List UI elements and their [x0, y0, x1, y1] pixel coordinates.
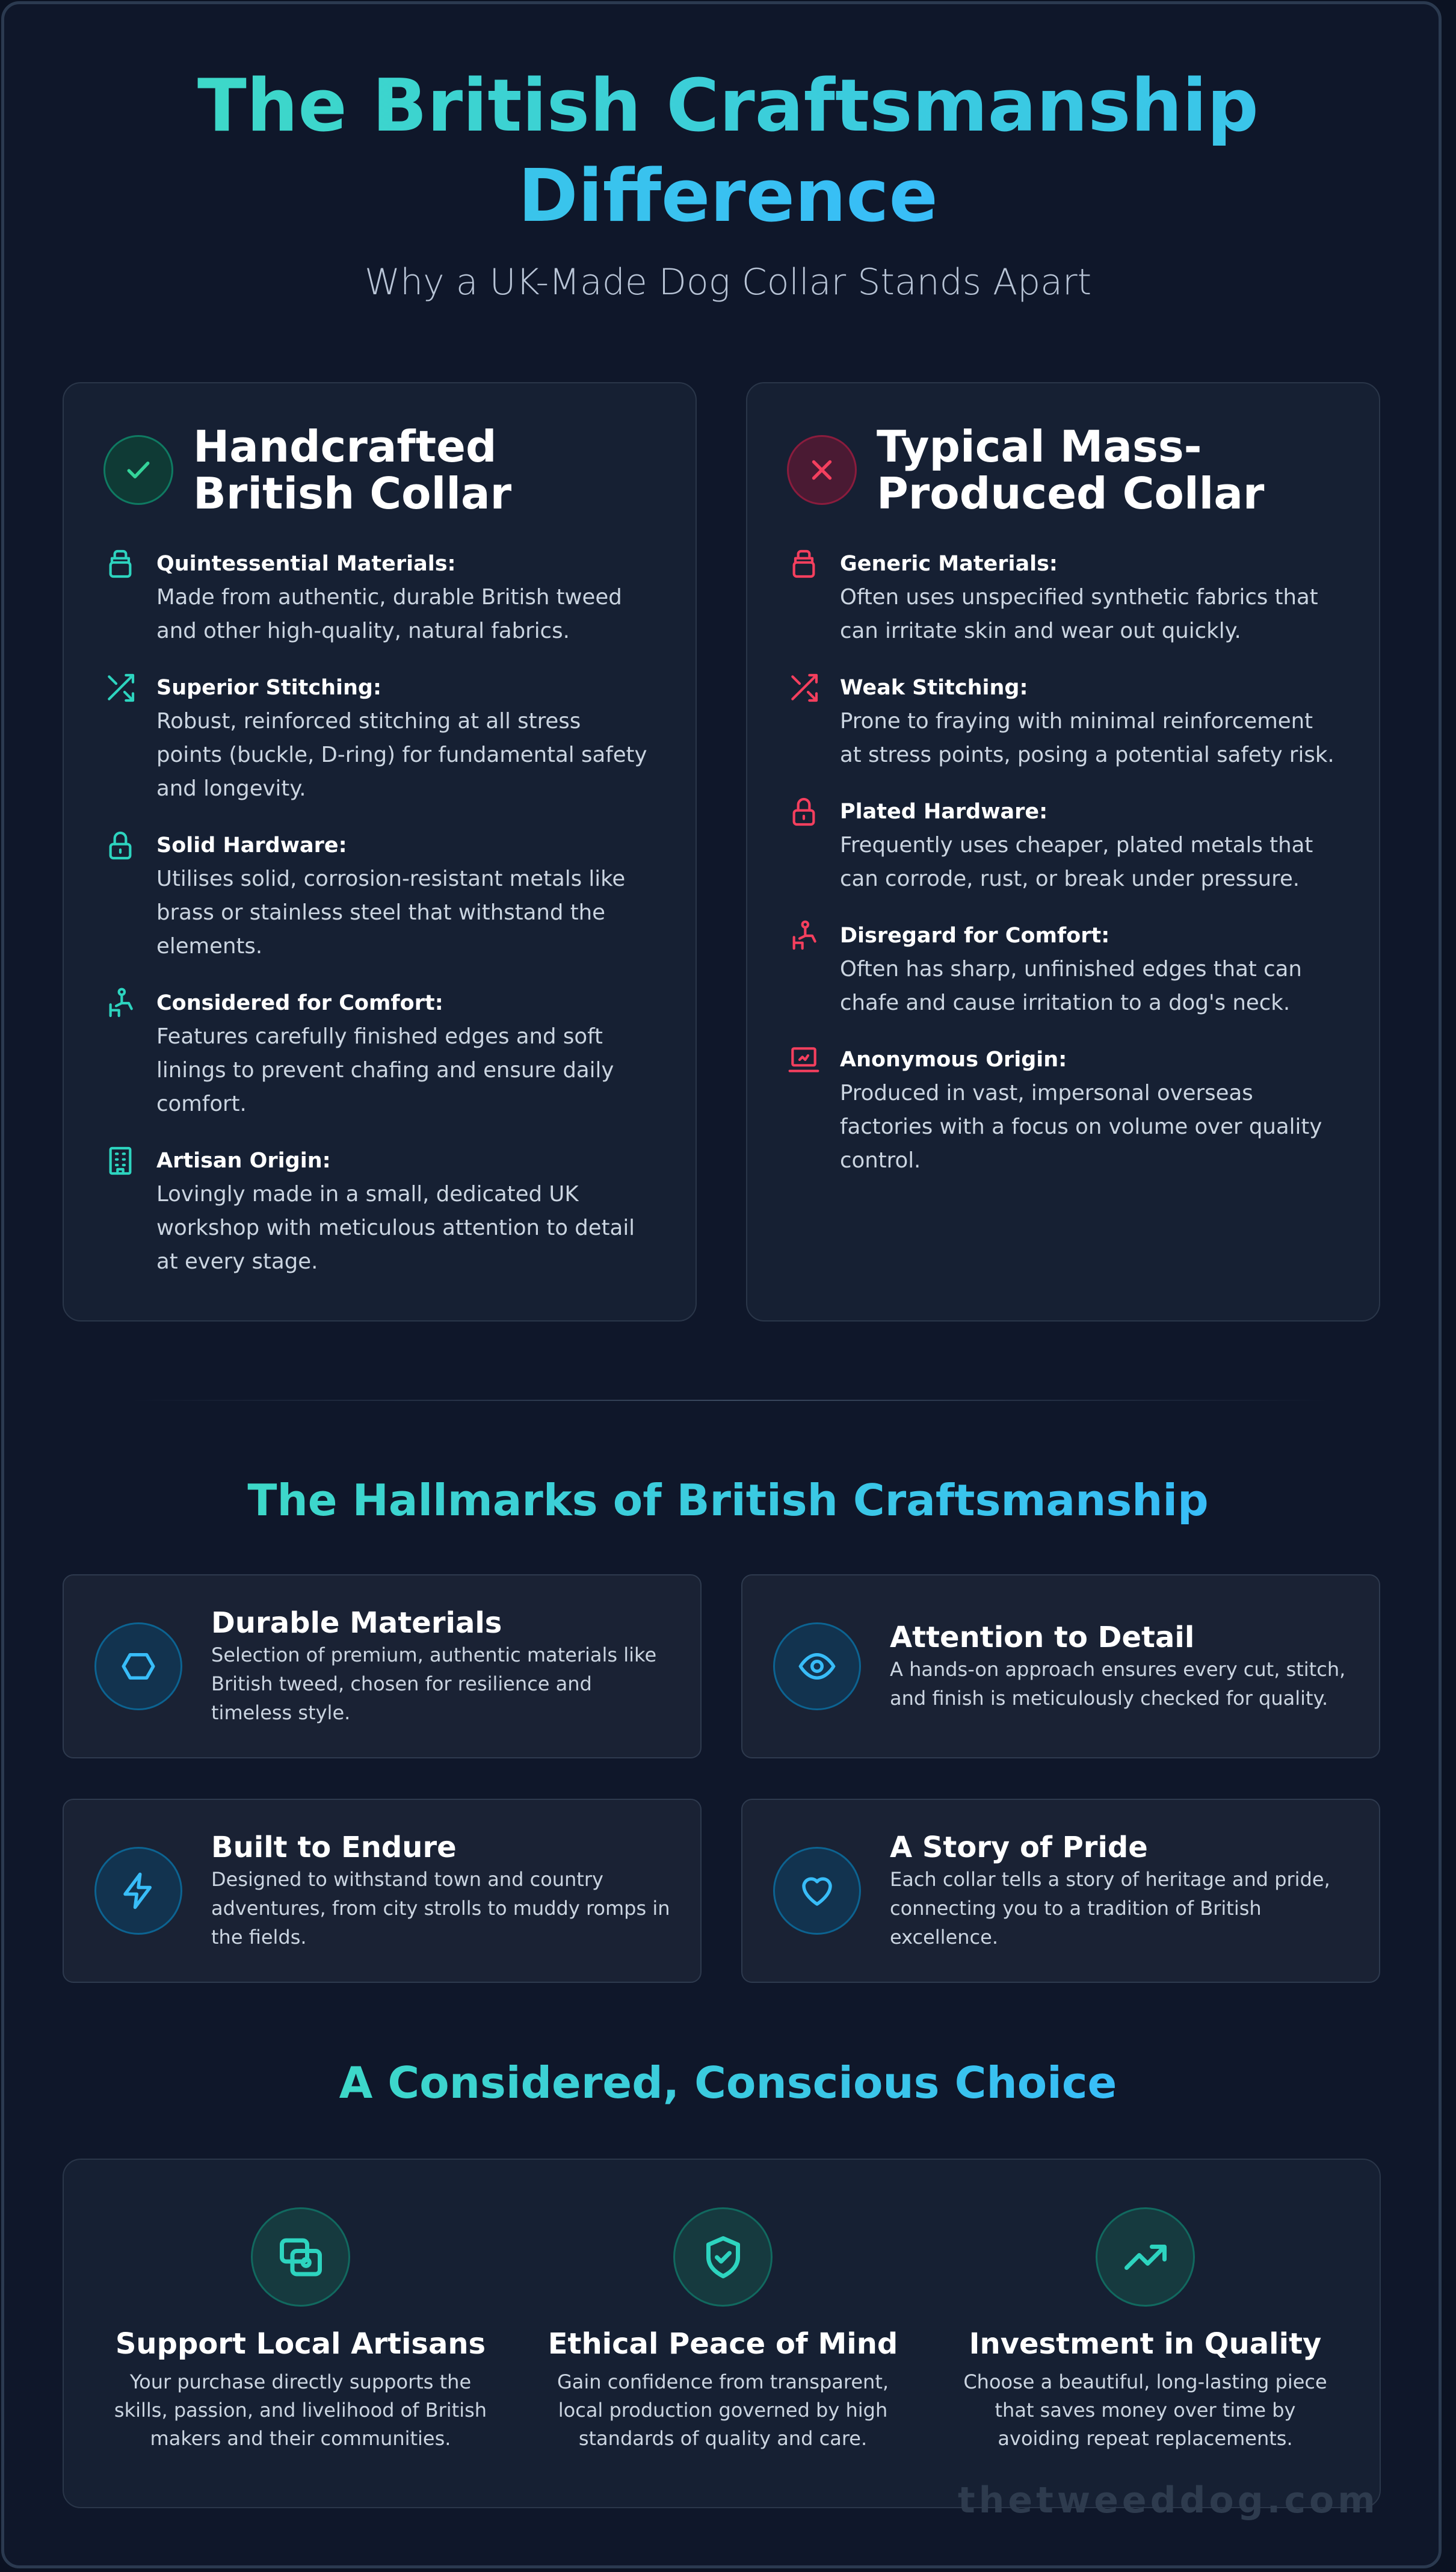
item: generic materials: Often uses unspecified synthetic fabrics that — [840, 585, 1318, 610]
item: anonymous origin — [788, 1047, 1322, 1173]
item: generic materials — [793, 550, 1318, 643]
item: considered for comfort — [110, 988, 614, 1116]
card: a story of pride: excellence. — [890, 1926, 998, 1949]
item: quintessential materials: Quintessential Materials: — [156, 552, 456, 576]
panel: handcrafted british collar — [63, 382, 697, 1322]
icon: check circle — [103, 435, 173, 505]
card: built to endure: Built to Endure — [211, 1831, 457, 1864]
item: considered for comfort: comfort. — [156, 1092, 247, 1116]
heading: considered choice: A Considered, Conscious Choice — [339, 2057, 1117, 2108]
item: generic materials: can irritate skin and wear out quickly. — [840, 619, 1241, 643]
item: solid hardware — [110, 832, 625, 959]
list: handcrafted features — [108, 550, 647, 1274]
card: attention to detail: and finish is meticulously checked for quality. — [890, 1687, 1328, 1710]
watermark: thetweeddog.com — [958, 2479, 1379, 2521]
item: anonymous origin: control. — [840, 1148, 921, 1173]
item: considered for comfort: linings to prevent chafing and ensure daily — [156, 1058, 614, 1083]
card heading: handcrafted — [103, 421, 511, 519]
item: weak stitching: Prone to fraying with minimal reinforcement — [840, 709, 1313, 734]
card: a story of pride — [741, 1799, 1380, 1983]
title — [197, 64, 1259, 238]
item: solid hardware: brass or stainless steel that withstand the — [156, 900, 605, 925]
item: weak stitching: at stress points, posing a potential safety risk. — [840, 743, 1334, 767]
card: attention to detail: A hands-on approach ensures every cut, stitch, — [890, 1658, 1345, 1681]
card: built to endure: Designed to withstand town and country — [211, 1868, 603, 1891]
item: artisan origin: Artisan Origin: — [156, 1149, 331, 1173]
column: support local artisans — [114, 2207, 487, 2450]
item: anonymous origin: factories with a focus on volume over quality — [840, 1114, 1322, 1139]
column: support local artisans: makers and their communities. — [150, 2427, 451, 2450]
icon: eye — [773, 1622, 861, 1710]
card: built to endure — [63, 1799, 702, 1983]
card: a story of pride: Each collar tells a story of heritage and pride, — [890, 1868, 1330, 1891]
item: artisan origin: workshop with meticulous attention to detail — [156, 1216, 635, 1240]
item: weak stitching: Weak Stitching: — [840, 676, 1028, 700]
item: artisan origin: Lovingly made in a small, dedicated UK — [156, 1182, 579, 1207]
item: quintessential materials — [110, 550, 622, 643]
item: disregard for comfort: Often has sharp, unfinished edges that can — [840, 957, 1302, 982]
column: investment in quality: Choose a beautiful, long-lasting piece — [963, 2370, 1327, 2393]
item: quintessential materials: Made from authentic, durable British tweed — [156, 585, 622, 610]
panel: mass-produced collar — [746, 382, 1380, 1322]
card: durable materials: timeless style. — [211, 1701, 350, 1724]
column: support local artisans: Support Local Artisans — [116, 2327, 486, 2361]
icon: trending up — [1096, 2207, 1195, 2307]
card: durable materials — [63, 1574, 702, 1758]
item: superior stitching — [108, 674, 647, 801]
list: mass-produced drawbacks — [788, 550, 1334, 1173]
item: disregard for comfort: Disregard for Comfort: — [840, 924, 1109, 948]
card heading: mass-produced: Produced Collar — [877, 468, 1264, 519]
item: superior stitching: Superior Stitching: — [156, 676, 381, 700]
item: solid hardware: elements. — [156, 934, 262, 959]
item: anonymous origin: Anonymous Origin: — [840, 1048, 1067, 1072]
card heading: handcrafted: Handcrafted — [193, 421, 497, 472]
card heading: handcrafted: British Collar — [193, 468, 511, 519]
column: investment in quality — [963, 2207, 1327, 2450]
item: plated hardware: can corrode, rust, or break under pressure. — [840, 867, 1300, 891]
card: built to endure: the fields. — [211, 1926, 307, 1949]
card heading: mass-produced: Typical Mass- — [877, 421, 1202, 472]
item: solid hardware: Solid Hardware: — [156, 833, 347, 858]
column: ethical peace of mind — [548, 2207, 898, 2450]
icon: money — [251, 2207, 350, 2307]
item: artisan origin: at every stage. — [156, 1249, 318, 1274]
item: disregard for comfort: chafe and cause irritation to a dog's neck. — [840, 991, 1290, 1015]
icon: shield check — [673, 2207, 773, 2307]
card: durable materials: Durable Materials — [211, 1606, 502, 1640]
item: quintessential materials: and other high-quality, natural fabrics. — [156, 619, 570, 643]
item: plated hardware: Plated Hardware: — [840, 800, 1047, 824]
column: ethical peace of mind: standards of quality and care. — [579, 2427, 867, 2450]
card: durable materials: Selection of premium, authentic materials like — [211, 1643, 656, 1666]
icon: gem — [94, 1622, 182, 1710]
column: support local artisans: Your purchase directly supports the — [130, 2370, 471, 2393]
item: plated hardware — [793, 798, 1313, 891]
panel: choice benefits — [63, 2159, 1381, 2508]
item: solid hardware: Utilises solid, corrosion-resistant metals like — [156, 867, 625, 891]
item: superior stitching: Robust, reinforced stitching at all stress — [156, 709, 581, 734]
item: weak stitching — [791, 674, 1334, 767]
item: considered for comfort: Considered for Comfort: — [156, 991, 443, 1015]
column: ethical peace of mind: local production governed by high — [558, 2399, 887, 2422]
heading: hallmarks: The Hallmarks of British Craftsmanship — [247, 1475, 1209, 1526]
icon: heart — [773, 1847, 861, 1935]
card heading: mass-produced — [787, 421, 1265, 519]
card: a story of pride: A Story of Pride — [890, 1831, 1148, 1864]
column: support local artisans: skills, passion, and livelihood of British — [114, 2399, 487, 2422]
item: disregard for comfort — [793, 921, 1302, 1015]
card: attention to detail: Attention to Detail — [890, 1621, 1194, 1654]
item: generic materials: Generic Materials: — [840, 552, 1058, 576]
card: a story of pride: connecting you to a tradition of British — [890, 1897, 1262, 1920]
title: The British Craftsmanship — [197, 64, 1259, 148]
item: superior stitching: and longevity. — [156, 776, 306, 801]
item: anonymous origin: Produced in vast, impersonal overseas — [840, 1081, 1253, 1105]
item: considered for comfort: Features carefully finished edges and soft — [156, 1024, 603, 1049]
icon: x circle — [787, 435, 857, 505]
card: durable materials: British tweed, chosen for resilience and — [211, 1672, 592, 1695]
item: artisan origin — [110, 1147, 635, 1274]
subtitle: Why a UK-Made Dog Collar Stands Apart — [365, 261, 1091, 303]
column: ethical peace of mind: Gain confidence from transparent, — [557, 2370, 889, 2393]
item: plated hardware: Frequently uses cheaper, plated metals that — [840, 833, 1313, 858]
title: Difference — [518, 155, 938, 238]
item: superior stitching: points (buckle, D-ring) for fundamental safety — [156, 743, 647, 767]
card: built to endure: adventures, from city strolls to muddy romps in — [211, 1897, 670, 1920]
icon: lightning — [94, 1847, 182, 1935]
column: investment in quality: that saves money over time by — [995, 2399, 1295, 2422]
column: investment in quality: avoiding repeat replacements. — [998, 2427, 1293, 2450]
column: investment in quality: Investment in Quality — [969, 2327, 1321, 2361]
column: ethical peace of mind: Ethical Peace of Mind — [548, 2327, 898, 2361]
card: attention to detail — [741, 1574, 1380, 1758]
